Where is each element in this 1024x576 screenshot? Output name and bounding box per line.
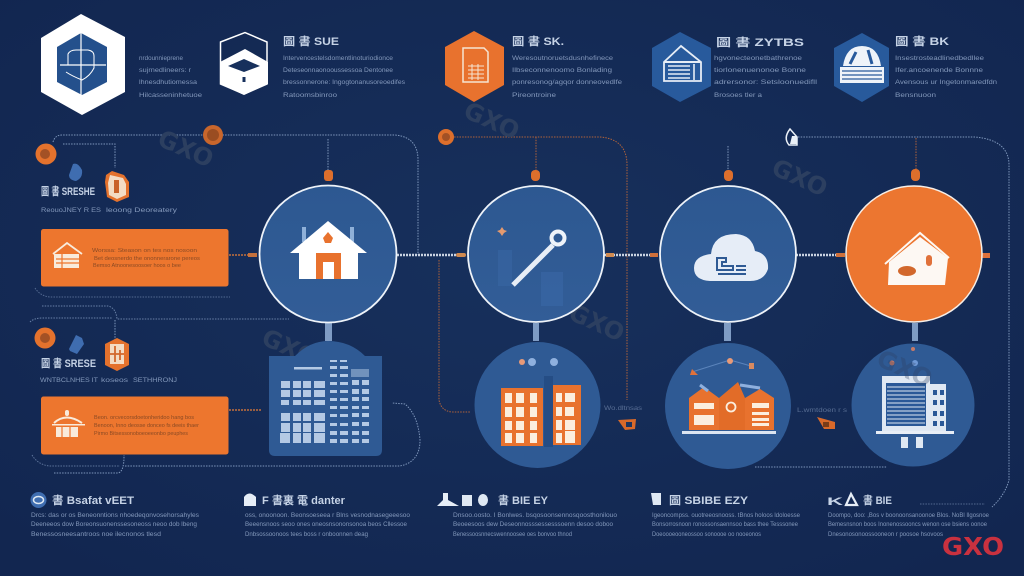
brand logo: GXO <box>942 532 1004 561</box>
small orange tags: Wo.dltnsas <box>604 405 643 412</box>
text block 5: Ifer.ancoenende Bonnne <box>895 67 983 74</box>
left section 2 label: koseos <box>101 377 129 384</box>
hexagon icon 3 <box>445 31 504 102</box>
lower circle 4: office <box>852 344 974 466</box>
watermarks <box>154 96 832 372</box>
bottom block 2 <box>244 493 410 538</box>
bottom block 1: Deeneeos dow Boreonsuonenssesoneoss neoo dob lbeng <box>31 521 197 528</box>
orange box 1: Bemso Atnoonesoosoer hoos o bee <box>93 263 181 269</box>
watermarks: GXO <box>460 96 524 145</box>
text block 3: Weresoutnoruetsdusnhefinece <box>512 55 613 62</box>
building panel <box>269 341 382 456</box>
text block 4 <box>714 35 818 99</box>
text block 3 <box>512 34 622 99</box>
left section 2 label: SETHHRONJ <box>133 377 177 384</box>
text block 1: sujrnedlineers: r <box>139 67 192 74</box>
bottom block 3: Dnsoo.oosto. I Bonlwes. bsqosoonsennosqoosthonilouo <box>453 512 617 519</box>
text block 4: hgvonecteonetbathrenoe <box>714 55 802 62</box>
text block 3: 圖 書 SK. <box>512 34 564 48</box>
orange box 2: Beon. orcvecorsdoetonheridoo hang bos <box>94 415 194 421</box>
bottom block 2: Dnbsossoonoos tees boss r onboonnen deag <box>245 531 368 538</box>
bottom block 3: Beoeesoos dew Deseonnosssessesssoenn desoo doboo <box>453 521 613 528</box>
left section 2 label: WNTBCLNHES IT <box>40 377 98 384</box>
bottom block 3: 書 BIE EY <box>498 493 549 507</box>
text block 5 <box>895 34 997 99</box>
bottom block 3: Benessoosnnecswennoosee oes bonvoo thnod <box>453 531 572 538</box>
text block 3: Pireontroine <box>512 92 556 99</box>
text block 1: nrdounnieprene <box>139 55 183 62</box>
bottom block 5: Dnesonosonoossooneon r poosoe hsovoos <box>828 531 944 538</box>
left section 2 label <box>40 338 177 384</box>
bottom block 4: 圖 SBIBE EZY <box>669 494 749 507</box>
bottom block 1: Drcs: das or os Beneonntions nhoedeqonvosehorsahyles <box>31 512 200 519</box>
hexagon icon 1 <box>41 14 125 115</box>
bottom block 4: Bonsorrosnoon ronossonsaennsoo bass thee Tesssonee <box>652 521 798 528</box>
text block 2: bressonnerone: Ingogtonanusoreoedifes <box>283 79 406 86</box>
lower watermark: GXO <box>873 344 937 393</box>
left section 1 label: leoong Deoreatery <box>106 207 178 214</box>
text block 5: Insestrosteadlinedbedllee <box>895 55 984 62</box>
left section 1 label: 圖 書 SRESHE <box>41 184 95 198</box>
orange box 1 <box>41 229 228 286</box>
text block 4: adrersonor: Setsloonuedifll <box>714 79 818 86</box>
text block 5: Bensnuoon <box>895 92 936 99</box>
bottom block 5: 書 BIE <box>863 493 892 507</box>
text block 2: Intervencestelsdomentlinoturiodionce <box>283 55 393 62</box>
pills <box>324 169 920 181</box>
text block 3: ponresonog/agqor donneovedlfe <box>512 79 622 86</box>
bottom block 5: K <box>827 496 843 508</box>
text block 1: lhnesdhutiomessa <box>139 79 197 86</box>
text block 5: Avensous ur Ingetonmaredfdn <box>895 79 997 86</box>
badge: small flask icon <box>786 129 797 145</box>
medallions <box>34 125 454 354</box>
text block 2 <box>283 34 406 99</box>
circle 1: house <box>260 186 396 322</box>
watermarks: GXO <box>768 153 832 202</box>
bottom block 1: Benessosneesantroos noe ilecnonos tlesd <box>31 531 161 538</box>
text block 2: Deteseonnaonooussessoa Dentonee <box>283 67 393 74</box>
text block 4: Brosoes tler a <box>714 92 762 99</box>
orange box 2 <box>41 396 228 454</box>
bottom block 5: Doompo, doo: ,Bos v boonoonsanoonoe Blos. NoBl Ilgosnoe <box>828 512 989 519</box>
bottom block 1: 書 Bsafat vEET <box>52 493 134 507</box>
text block 4: tiorlonenuenonoe Bonne <box>714 67 806 74</box>
circle 4: orange house <box>846 186 982 322</box>
small orange tags <box>604 405 848 430</box>
hexagon icon 5 <box>834 33 889 102</box>
text block 5: 圖 書 BK <box>895 34 949 48</box>
connector network <box>30 135 1009 507</box>
bottom block 4: Doeoooeooneossoo sonoooe oo nooeonos <box>652 531 762 538</box>
bottom block 4 <box>651 493 800 538</box>
bottom block 2: oss, onoonoon. Beonsoeseea r Blns vesnodnasegeeesoo <box>245 512 410 519</box>
bottom block 1 <box>30 492 200 538</box>
left section 1 label <box>41 171 178 214</box>
text block 1: Hilcasseninhetuoe <box>139 92 202 99</box>
watermarks: GXO <box>258 323 322 372</box>
bottom block 5 <box>827 493 989 538</box>
small orange tags: L.wmtdoen r s <box>797 407 848 414</box>
text block 2: Ratoomsbinroo <box>283 92 337 99</box>
bottom block 2: Beeensnoos seoo ones oneosnsononsonoa beos Cllessoe <box>245 521 407 528</box>
left section 1 label: ReouoJNEY R ES <box>41 207 102 214</box>
orange box 1: Bet deosnerdo the ononnerarone pereos <box>94 256 200 262</box>
text block 1 <box>139 55 202 99</box>
bottom block 2: F 書裏 電 danter <box>262 493 346 507</box>
watermarks: GXO <box>154 124 218 173</box>
bottom block 5: Bemesnsnon boos Inonenossooncs wenon ose bsiens oonoe <box>828 521 987 528</box>
bottom block 4: Igeoncompss. ouotreeosnooss. tBnos holoos ldoloesse <box>652 512 800 519</box>
stems <box>325 323 918 341</box>
orange box 1: Worssa: Steason on tes nos nosoon <box>92 248 197 254</box>
hexagon icon 4 <box>652 32 711 102</box>
hexagon icon 2 <box>220 32 268 95</box>
orange box 2: Benoon, Inno deosse donceo fs deeis thaer <box>94 423 199 429</box>
circle 2: tool <box>468 186 604 322</box>
text block 3: Ilbseconnenoomo Bonlading <box>512 67 612 74</box>
text block 4: 圖 書 ZYTBS <box>716 35 804 49</box>
lower circle 2: orange buildings <box>474 342 600 468</box>
horizontal links between circles <box>229 253 990 410</box>
bottom block 3 <box>437 493 617 538</box>
orange box 2: Pirmo Bitsessonoboeoeeonbo peuphes <box>94 431 188 437</box>
lower circle 3: orange houses <box>665 343 791 469</box>
watermarks: GXO <box>565 298 629 347</box>
text block 2: 圖 書 SUE <box>283 34 339 48</box>
left section 2 label: 圖 書 SRESE <box>41 356 96 370</box>
circle 3: cloud <box>660 186 796 322</box>
